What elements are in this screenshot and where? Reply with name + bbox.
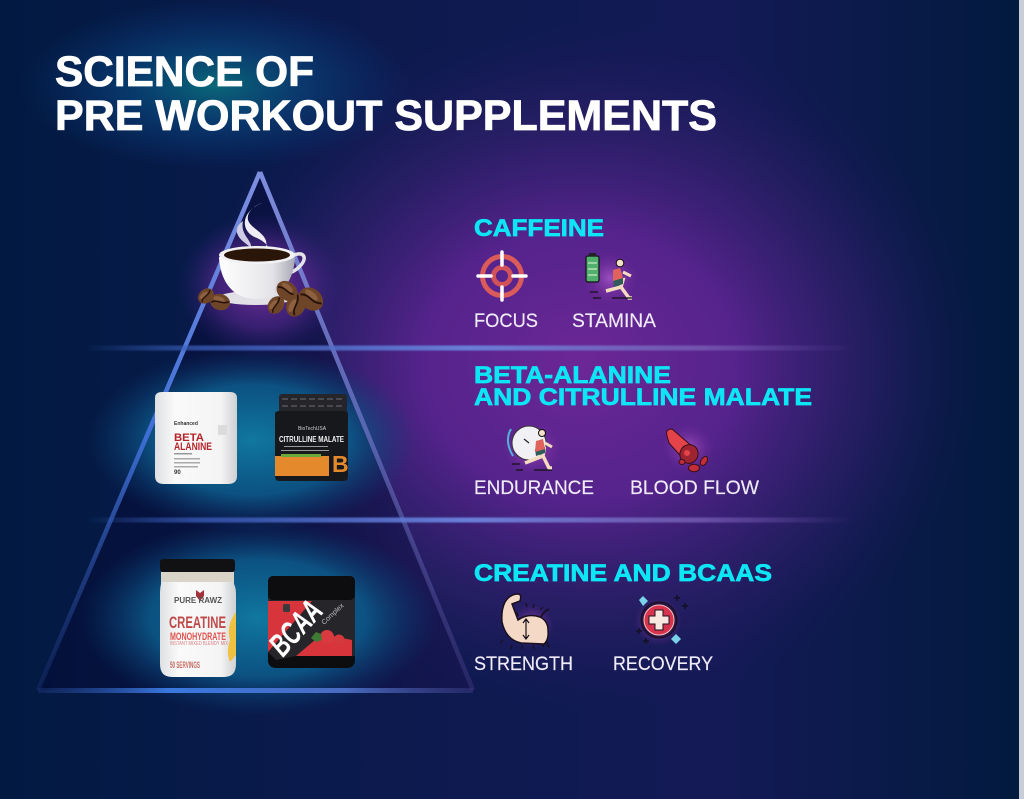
product: citrulline malate tub bbox=[275, 394, 349, 481]
label: STRENGTH bbox=[474, 654, 573, 675]
product: beta alanine tub bbox=[155, 392, 237, 484]
icon: recovery cross badge bbox=[634, 595, 688, 646]
label: RECOVERY bbox=[613, 654, 713, 675]
section: beta-alanine and citrulline malate bbox=[474, 362, 812, 499]
saucer bbox=[218, 291, 294, 305]
product: creatine monohydrate jar: MONOHYDRATE bbox=[170, 631, 226, 643]
glow behind middle products bbox=[87, 348, 417, 532]
section: creatine and bcaas bbox=[474, 560, 772, 675]
label: STAMINA bbox=[572, 311, 656, 332]
icon: stamina runner and battery bbox=[582, 252, 638, 304]
product: creatine monohydrate jar bbox=[160, 559, 236, 677]
product: beta alanine tub: ALANINE bbox=[174, 441, 212, 453]
product: creatine monohydrate jar: INSTANT MIXED BLENDY MIX bbox=[170, 641, 229, 647]
glow behind bottom products bbox=[78, 520, 438, 716]
divider lower bbox=[85, 518, 855, 522]
label: FOCUS bbox=[474, 311, 538, 332]
icon: coffee cup with beans bbox=[195, 203, 328, 320]
product: citrulline malate tub: BioTechUSA bbox=[298, 426, 327, 432]
product: citrulline malate tub: CITRULLINE MALATE bbox=[279, 435, 345, 444]
product: beta alanine tub: Enhanced bbox=[174, 421, 198, 427]
pyramid base bbox=[38, 688, 473, 693]
pyramid bbox=[38, 170, 473, 716]
label: BLOOD FLOW bbox=[630, 478, 759, 499]
steam bbox=[245, 203, 268, 248]
title bbox=[55, 48, 717, 140]
heading: AND CITRULLINE MALATE bbox=[474, 384, 812, 411]
section: caffeine bbox=[474, 215, 656, 332]
handle bbox=[288, 254, 304, 274]
beans bbox=[195, 285, 217, 307]
icon: flexed arm bbox=[500, 594, 554, 649]
product: bcaa tub: Complex bbox=[321, 602, 346, 626]
icon: focus target bbox=[478, 252, 526, 300]
product: beta alanine tub: 90 bbox=[174, 470, 181, 476]
divider upper bbox=[85, 346, 855, 350]
cup bbox=[219, 257, 295, 299]
product: citrulline malate tub: B bbox=[332, 451, 349, 477]
heading: CREATINE AND BCAAS bbox=[474, 560, 772, 587]
pyramid right side bbox=[260, 172, 473, 690]
pyramid left side bbox=[38, 172, 260, 690]
heading: BETA-ALANINE bbox=[474, 362, 671, 389]
label: ENDURANCE bbox=[474, 478, 594, 499]
product: bcaa tub: BCAA bbox=[261, 593, 330, 663]
product: creatine monohydrate jar: 50 SERVINGS bbox=[170, 660, 200, 670]
title: PRE WORKOUT SUPPLEMENTS bbox=[55, 92, 717, 140]
product: beta alanine tub: BETA bbox=[174, 432, 204, 444]
glow behind coffee bbox=[177, 213, 347, 357]
icon: endurance runner and stopwatch bbox=[502, 423, 562, 475]
heading bbox=[474, 362, 812, 411]
heading: CAFFEINE bbox=[474, 215, 604, 242]
icon: blood vessel with cells bbox=[662, 424, 714, 472]
product: creatine monohydrate jar: PURE RAWZ bbox=[174, 596, 222, 605]
title: SCIENCE OF bbox=[55, 48, 314, 96]
product: creatine monohydrate jar: CREATINE bbox=[169, 613, 226, 632]
